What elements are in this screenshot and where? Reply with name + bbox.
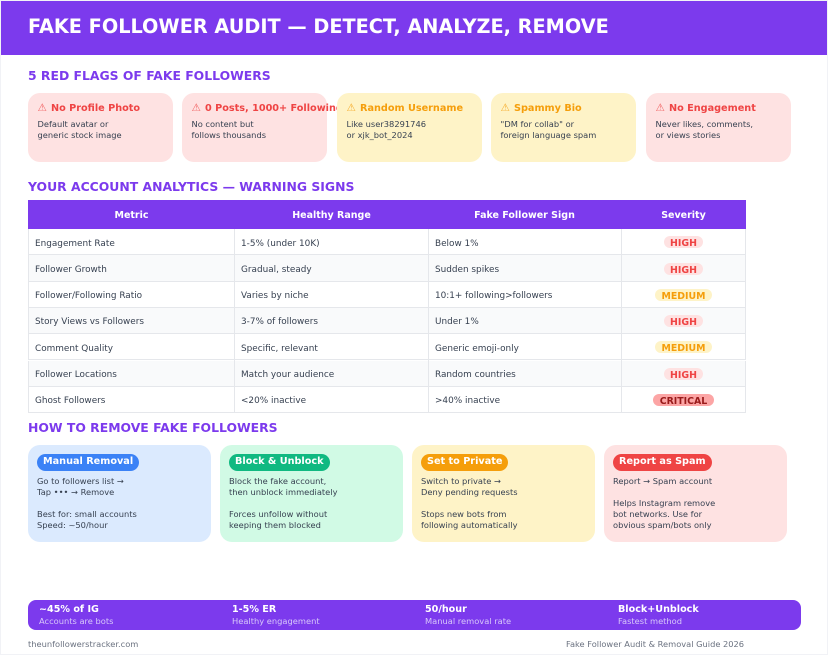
analytics table: HIGH bbox=[670, 264, 697, 276]
flag text: or views stories bbox=[656, 130, 720, 140]
analytics table: Below 1% bbox=[435, 239, 479, 249]
stat: removal rate: 50/hour bbox=[425, 604, 467, 615]
panel: red flag no engagement bbox=[646, 93, 791, 162]
analytics table: Metric bbox=[114, 210, 148, 221]
method text: Best for: small accounts bbox=[37, 509, 137, 519]
analytics table: Engagement Rate bbox=[35, 239, 115, 249]
analytics table: Story Views vs Followers bbox=[35, 317, 144, 327]
method label: Manual Removal bbox=[43, 456, 133, 467]
analytics table: HIGH bbox=[670, 317, 697, 328]
analytics table: 1-5% (under 10K) bbox=[241, 239, 320, 249]
analytics table: CRITICAL bbox=[660, 396, 707, 406]
panel: manual removal bbox=[28, 445, 211, 542]
analytics table: Ghost Followers bbox=[35, 396, 105, 406]
analytics table: Follower/Following Ratio bbox=[35, 291, 142, 301]
method label: Report as Spam bbox=[619, 456, 706, 467]
method text: Helps Instagram remove bbox=[613, 498, 715, 508]
stat: fastest method bbox=[618, 604, 699, 626]
analytics table: 10:1+ following>followers bbox=[435, 291, 552, 301]
stat: bots share: ~45% of IG bbox=[39, 604, 99, 615]
flag text: Like user38291746 bbox=[346, 119, 426, 129]
stat: healthy engagement: 1-5% ER bbox=[232, 604, 276, 615]
analytics table: 3-7% of followers bbox=[241, 317, 318, 327]
stat: fastest method: Block+Unblock bbox=[618, 604, 699, 615]
flag text: Default avatar or bbox=[38, 119, 108, 129]
flag title: No Engagement bbox=[669, 103, 756, 114]
flag title: ⚠ bbox=[38, 102, 47, 114]
analytics table: Random countries bbox=[435, 370, 516, 380]
analytics table: Fake Follower Sign bbox=[474, 210, 575, 221]
stat: bots share bbox=[39, 604, 113, 626]
analytics table: MEDIUM bbox=[662, 291, 705, 302]
method label bbox=[37, 454, 139, 471]
analytics table: Follower Growth bbox=[35, 265, 107, 275]
method text: following automatically bbox=[421, 520, 518, 530]
heading: red flags: 5 RED FLAGS OF FAKE FOLLOWERS bbox=[28, 68, 271, 83]
flag text bbox=[192, 119, 266, 140]
title: FAKE FOLLOWER AUDIT — DETECT, ANALYZE, REMOVE bbox=[28, 15, 609, 38]
stat: fastest method: Fastest method bbox=[618, 616, 682, 626]
flag text: "DM for collab" or bbox=[500, 119, 574, 129]
flag text bbox=[500, 119, 596, 140]
method text: Deny pending requests bbox=[421, 487, 518, 497]
panel: red flag random username bbox=[337, 93, 482, 162]
stat: removal rate: Manual removal rate bbox=[425, 616, 511, 626]
method text bbox=[613, 476, 715, 530]
flag text: No content but bbox=[192, 119, 254, 129]
analytics table: <20% inactive bbox=[241, 396, 306, 406]
analytics table: Varies by niche bbox=[241, 291, 309, 301]
flag text: or xjk_bot_2024 bbox=[346, 130, 413, 140]
stat: healthy engagement bbox=[232, 604, 320, 626]
title banner bbox=[1, 1, 827, 55]
flag title: Spammy Bio bbox=[514, 103, 582, 114]
method text: Speed: ~50/hour bbox=[37, 520, 108, 530]
stats bar bbox=[28, 600, 801, 630]
footer: website: theunfollowerstracker.com bbox=[28, 639, 138, 649]
method label bbox=[229, 454, 330, 471]
analytics table: HIGH bbox=[670, 370, 697, 380]
flag text bbox=[38, 119, 122, 140]
analytics table: Comment Quality bbox=[35, 344, 113, 354]
flag title: ⚠ bbox=[656, 102, 665, 114]
footer: guide title: Fake Follower Audit & Removal Guide 2026 bbox=[566, 639, 744, 649]
analytics table: Under 1% bbox=[435, 317, 479, 327]
flag text: foreign language spam bbox=[500, 130, 596, 140]
method text: keeping them blocked bbox=[229, 520, 321, 530]
stat: healthy engagement: Healthy engagement bbox=[232, 616, 320, 626]
method label bbox=[613, 454, 712, 471]
method text bbox=[229, 476, 338, 530]
stat: bots share: Accounts are bots bbox=[39, 616, 113, 626]
flag text bbox=[656, 119, 753, 140]
panel: set to private bbox=[412, 445, 595, 542]
analytics table: Healthy Range bbox=[292, 210, 371, 221]
analytics table: HIGH bbox=[670, 238, 697, 249]
heading: analytics: YOUR ACCOUNT ANALYTICS — WARNING SIGNS bbox=[28, 179, 354, 194]
panel: red flag no profile photo bbox=[28, 93, 173, 162]
flag title: 0 Posts, 1000+ Following bbox=[205, 103, 343, 114]
method text: Stops new bots from bbox=[421, 509, 506, 519]
method label: Set to Private bbox=[427, 456, 502, 467]
stat: removal rate bbox=[425, 604, 511, 626]
method text: Tap ••• → Remove bbox=[37, 487, 114, 497]
method text bbox=[421, 476, 518, 530]
analytics table: Match your audience bbox=[241, 370, 334, 380]
analytics table: Follower Locations bbox=[35, 370, 117, 380]
method label: Block & Unblock bbox=[235, 456, 324, 467]
analytics table: Generic emoji-only bbox=[435, 344, 519, 354]
method text: obvious spam/bots only bbox=[613, 520, 712, 530]
flag title: No Profile Photo bbox=[51, 103, 140, 114]
method text: Go to followers list → bbox=[37, 476, 124, 486]
method text: Block the fake account, bbox=[229, 476, 326, 486]
method text: Forces unfollow without bbox=[229, 509, 327, 519]
method label bbox=[421, 454, 508, 471]
method text: Switch to private → bbox=[421, 476, 501, 486]
method text: bot networks. Use for bbox=[613, 509, 702, 519]
method text: Report → Spam account bbox=[613, 476, 712, 486]
heading: how to remove: HOW TO REMOVE FAKE FOLLOWERS bbox=[28, 420, 278, 435]
flag title: ⚠ bbox=[500, 102, 510, 114]
flag title: Random Username bbox=[360, 103, 463, 114]
panel: block and unblock bbox=[220, 445, 403, 542]
flag title: ⚠ bbox=[346, 102, 356, 114]
analytics table: Severity bbox=[661, 210, 706, 221]
analytics table: >40% inactive bbox=[435, 396, 500, 406]
method text bbox=[36, 476, 137, 530]
flag title: ⚠ bbox=[192, 102, 201, 114]
panel: report as spam bbox=[604, 445, 787, 542]
analytics table bbox=[28, 200, 746, 413]
flag text: Never likes, comments, bbox=[656, 119, 753, 129]
analytics table: Specific, relevant bbox=[241, 344, 318, 354]
analytics table: Gradual, steady bbox=[241, 265, 312, 275]
method text: then unblock immediately bbox=[229, 487, 337, 497]
flag text: follows thousands bbox=[192, 130, 266, 140]
flag text bbox=[346, 119, 426, 140]
analytics table: Sudden spikes bbox=[435, 265, 499, 275]
panel: red flag zero posts bbox=[182, 93, 327, 162]
flag text: generic stock image bbox=[38, 130, 122, 140]
analytics table: MEDIUM bbox=[662, 343, 705, 354]
panel: red flag spammy bio bbox=[491, 93, 636, 162]
